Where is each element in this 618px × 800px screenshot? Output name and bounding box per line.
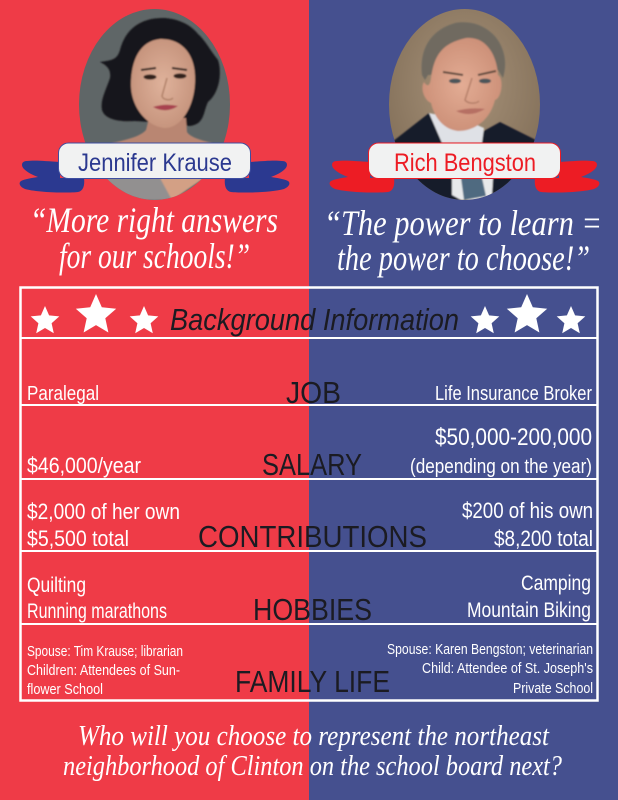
right stars — [471, 294, 585, 333]
row: contributions — [27, 498, 593, 554]
row: hobbies: Running marathons — [27, 600, 167, 623]
ribbon tail left — [20, 161, 84, 193]
closing question: Who will you choose to represent the northeast — [78, 721, 550, 752]
row: contributions: $200 of his own — [462, 498, 593, 523]
row: family life: flower School — [27, 681, 103, 698]
ribbon: Rich Bengston — [330, 143, 599, 193]
name: Rich Bengston — [394, 149, 536, 177]
quote: Jennifer Krause — [30, 200, 278, 276]
background: blue half — [309, 0, 618, 800]
row: salary — [27, 424, 592, 482]
background: red half — [0, 0, 309, 800]
heading text: Background Information — [170, 302, 459, 337]
name plate — [368, 143, 560, 178]
table heading: Background Information — [31, 294, 585, 337]
row: family life: Private School — [513, 680, 593, 697]
row: salary: (depending on the year) — [410, 456, 592, 478]
row: family life: FAMILY LIFE — [235, 664, 390, 699]
row: contributions: $8,200 total — [494, 526, 593, 551]
row: job — [27, 375, 592, 410]
row: job: Paralegal — [27, 383, 99, 405]
row: hobbies — [27, 572, 591, 627]
portrait: Jennifer Krause — [79, 9, 230, 200]
ribbon tail left — [330, 161, 394, 193]
row: family life: Spouse: Tim Krause; librarian — [27, 643, 183, 660]
row: family life: Children: Attendees of Sun- — [27, 662, 180, 679]
row: hobbies: Quilting — [27, 574, 86, 597]
name plate — [58, 143, 250, 178]
quote: Jennifer Krause: for our schools!” — [59, 236, 250, 276]
row: salary: $50,000-200,000 — [435, 424, 592, 451]
row: salary: $46,000/year — [27, 453, 141, 478]
row: contributions: CONTRIBUTIONS — [198, 519, 427, 554]
row: family life — [27, 641, 593, 699]
row: contributions: $2,000 of her own — [27, 499, 180, 524]
row: hobbies: Camping — [521, 572, 591, 595]
quote: Rich Bengston — [324, 203, 602, 278]
row: hobbies: Mountain Biking — [467, 599, 591, 622]
row: job: JOB — [286, 375, 341, 410]
portrait: Rich Bengston — [389, 9, 540, 200]
row: contributions: $5,500 total — [27, 526, 129, 551]
closing question — [63, 721, 562, 782]
quote: Jennifer Krause: “More right answers — [30, 200, 278, 240]
ribbon tail right — [225, 161, 289, 193]
name: Jennifer Krause — [78, 149, 232, 177]
row: salary: SALARY — [262, 447, 362, 482]
ribbon tail right — [535, 161, 599, 193]
left stars — [31, 294, 158, 333]
table frame — [20, 288, 598, 700]
ribbon: Jennifer Krause — [20, 143, 289, 193]
row: hobbies: HOBBIES — [253, 592, 372, 627]
